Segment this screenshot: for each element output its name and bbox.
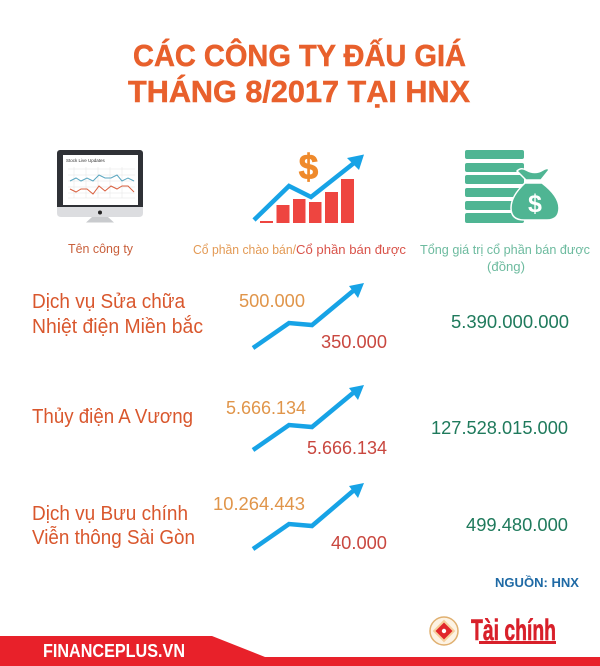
logo: Tài chính emblem [430, 617, 458, 645]
shares sold: 5.666.134 [307, 438, 387, 458]
column label: company name: Tên công ty [68, 241, 133, 256]
arrow [253, 385, 364, 450]
icon: monitor with stock chart: Stock Live Updates [66, 158, 106, 163]
icon: coin stack and money bag [465, 150, 559, 223]
title: THÁNG 8/2017 TẠI HNX [128, 74, 470, 109]
row 2: Thủy điện A Vương [32, 385, 568, 458]
total value: 5.390.000.000 [451, 312, 569, 332]
icon: coin stack and money bag: $ [528, 190, 542, 218]
column label: shares offered and sold [193, 242, 406, 257]
company name: Viễn thông Sài Gòn [32, 526, 195, 549]
shares offered: 500.000 [239, 291, 305, 311]
footer site name: FINANCEPLUS.VN [43, 641, 185, 661]
logo: Tài chính wordmark: Tài chính [471, 614, 556, 647]
row 3: Dịch vụ Bưu chính Viễn thông Sài Gòn [32, 483, 568, 553]
column label: shares offered and sold: Cổ phần chào bán/ [193, 242, 296, 257]
icon: rising bars with dollar and arrow [254, 148, 364, 223]
company name: Dịch vụ Sửa chữa [32, 291, 186, 313]
total value: 127.528.015.000 [431, 418, 568, 438]
logo: Tài chính wordmark [471, 614, 556, 647]
shares offered: 10.264.443 [213, 494, 305, 514]
column label: total value sold: Tổng giá trị cổ phần bán được [420, 242, 590, 257]
row 1: Dịch vụ Sửa chữa Nhiệt điện Miền bắc [32, 283, 569, 352]
shares offered: 5.666.134 [226, 398, 306, 418]
column label: total value sold: (đồng) [487, 259, 525, 274]
shares sold: 350.000 [321, 332, 387, 352]
title: CÁC CÔNG TY ĐẤU GIÁ [133, 37, 466, 73]
icon: monitor with stock chart [57, 150, 143, 222]
column label: shares offered and sold: Cổ phần bán được [296, 242, 406, 257]
shares sold: 40.000 [331, 533, 387, 553]
company name: Dịch vụ Bưu chính [32, 503, 188, 525]
total value: 499.480.000 [466, 515, 568, 535]
company name [32, 503, 195, 549]
company name: Thủy điện A Vương [32, 406, 193, 428]
source note: NGUỒN: HNX [495, 575, 580, 590]
arrow [253, 483, 364, 549]
company name: Nhiệt điện Miền bắc [32, 315, 203, 338]
icon: rising bars with dollar and arrow: $ [299, 148, 318, 187]
arrow [253, 283, 364, 348]
company name [32, 291, 203, 338]
column label: total value sold [420, 242, 590, 274]
title [128, 37, 470, 109]
footer bar [0, 636, 600, 666]
